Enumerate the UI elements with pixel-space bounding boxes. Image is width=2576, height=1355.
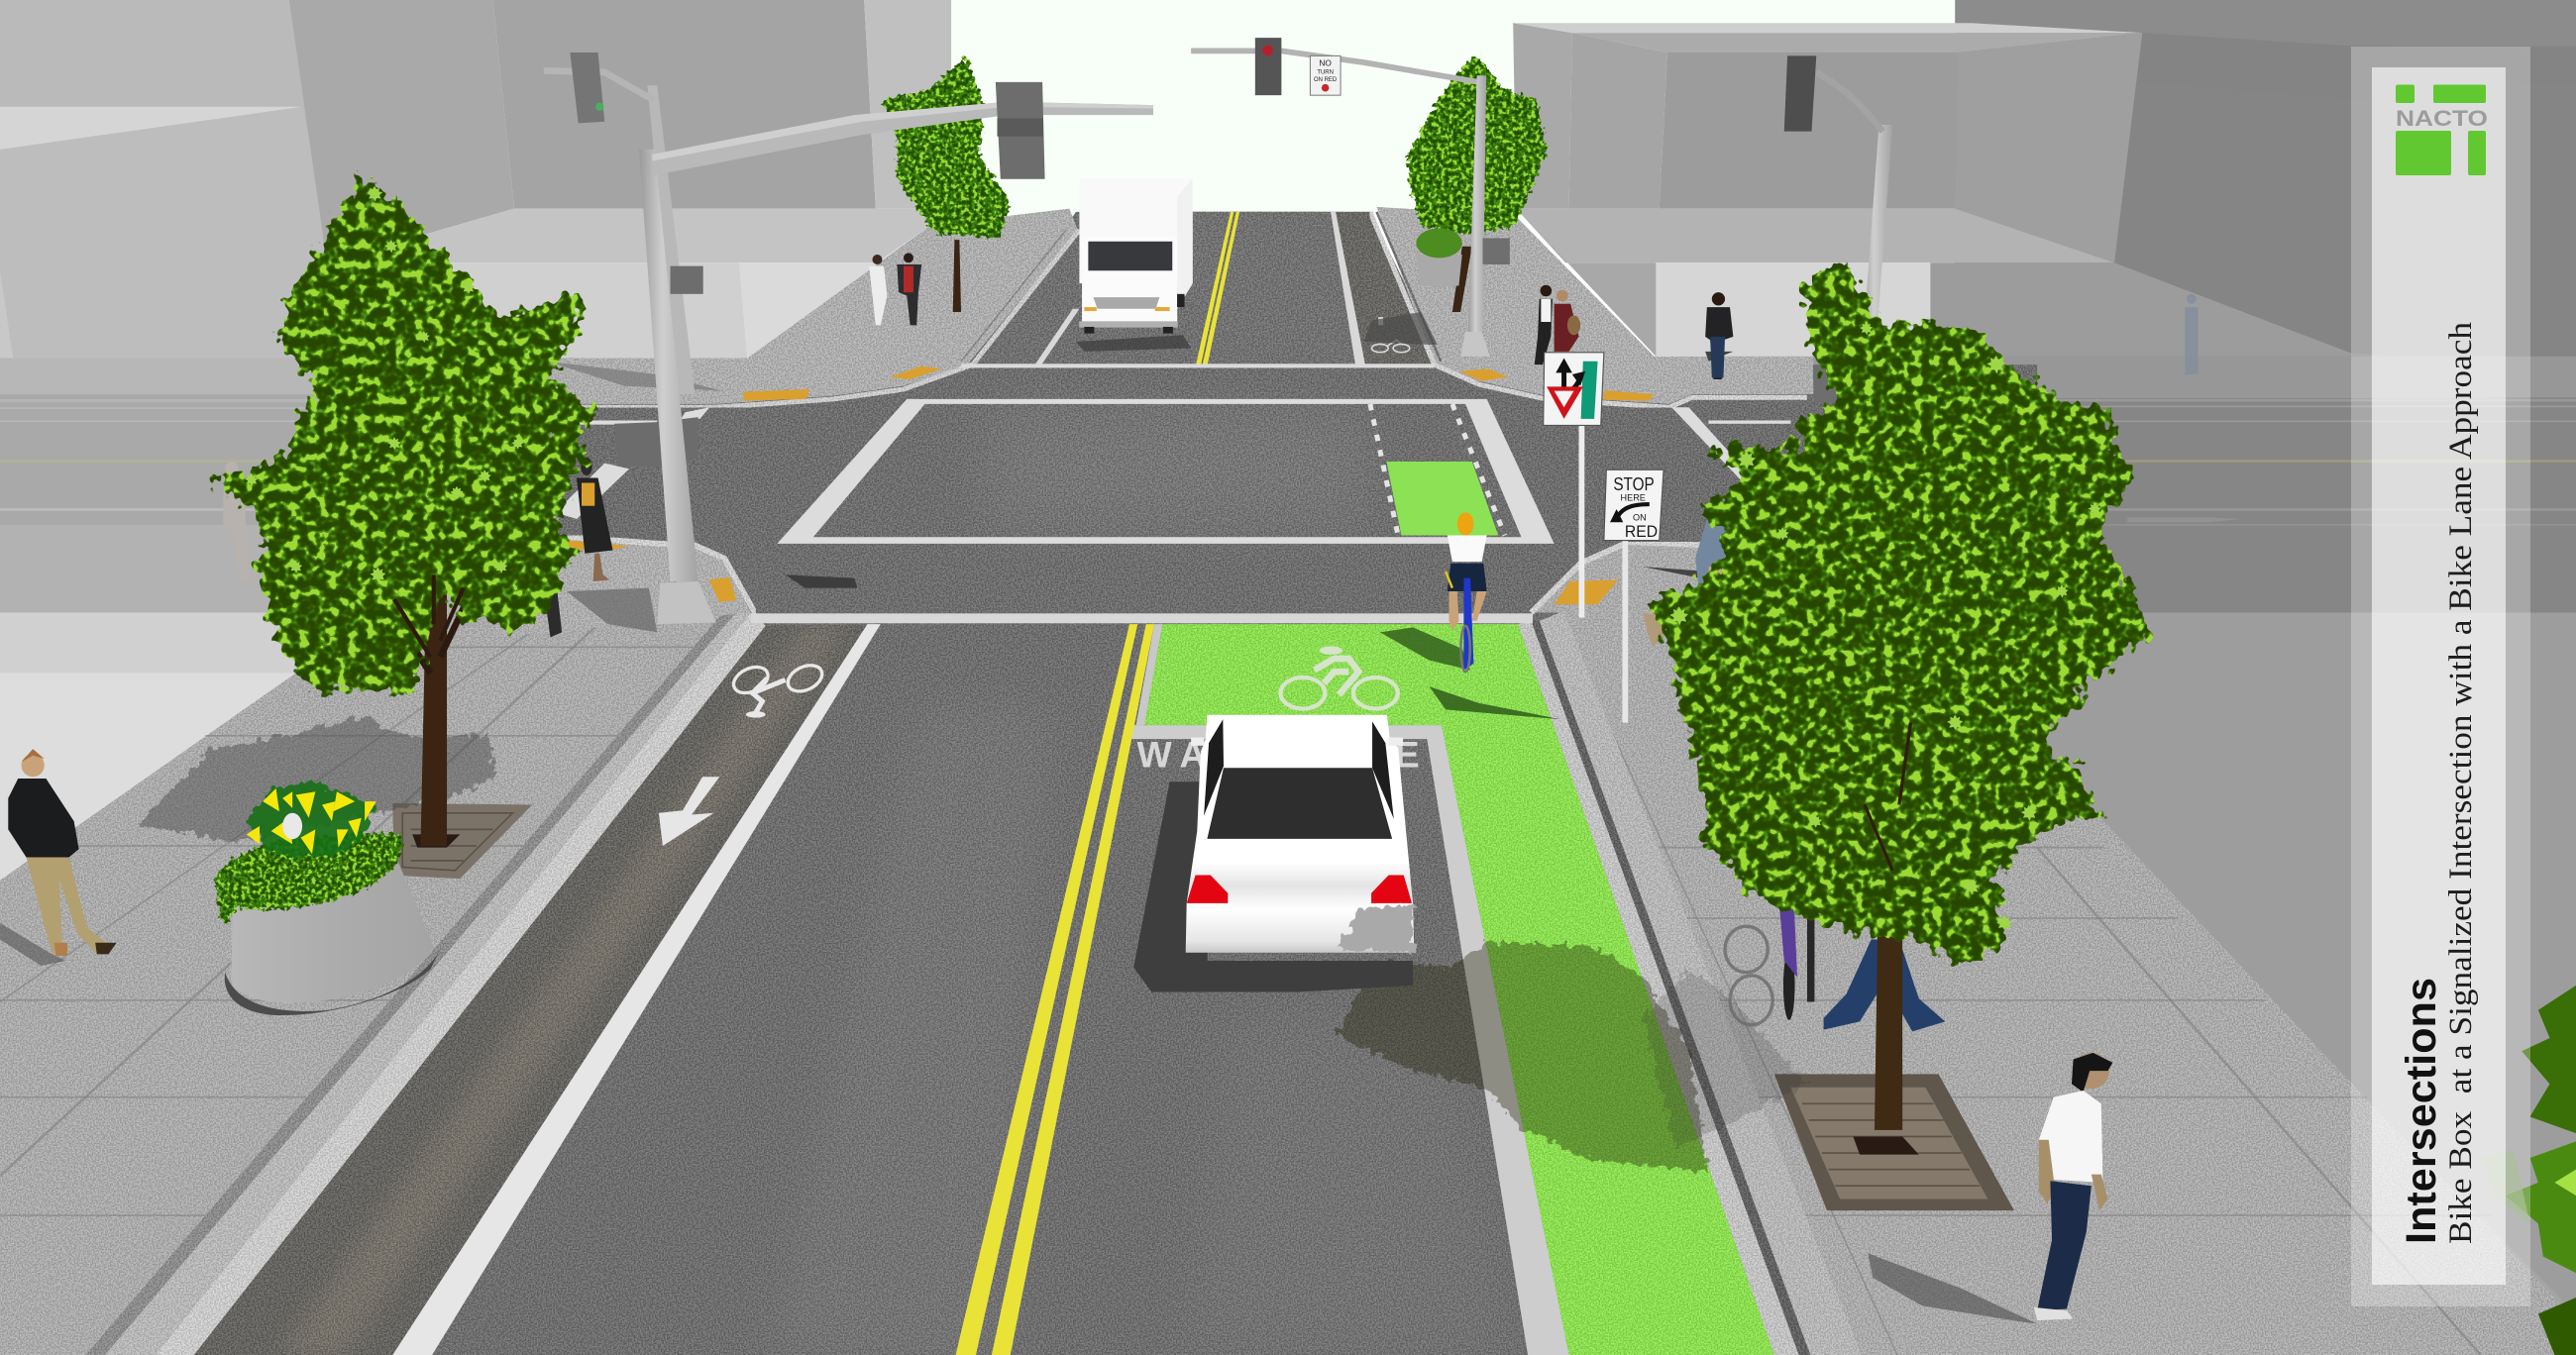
car shadow (1133, 782, 1413, 992)
faded pedestrian right (2185, 294, 2199, 374)
right big tree trunk (1840, 657, 1947, 1130)
left lane direction arrow (659, 777, 719, 846)
right edge tree foliage (2481, 986, 2576, 1355)
man behind tree (519, 529, 562, 637)
tree pit right (1774, 1074, 2014, 1210)
far right concrete planter (1416, 228, 1462, 286)
right signal pole (1784, 55, 1892, 402)
pedestrian behind right tree (1824, 886, 1945, 1031)
parked bicycle and rack (1725, 895, 1814, 1025)
no turn on red sign: NO (1319, 57, 1332, 67)
panel outer band (2351, 47, 2530, 1306)
planter shadow (225, 949, 440, 1015)
no turn on red sign: ON RED (1314, 77, 1338, 83)
far lane stripes (1035, 212, 1365, 365)
panel subheading: Bike Box at a Signalized Intersection with a Bike Lane Approach (2443, 321, 2479, 1244)
main left signal pole and mast arm (639, 82, 1153, 624)
NACTO logo (2396, 85, 2488, 175)
bike box white stripe (1130, 725, 1569, 1355)
flower bush (247, 781, 376, 858)
blue shirt pedestrian with dog (1643, 496, 1752, 647)
right big tree foliage (1643, 258, 2154, 969)
left bike lane symbol (729, 661, 826, 718)
truck (1079, 178, 1193, 334)
advanced bike box outline (777, 399, 1555, 544)
tree pit left (392, 803, 532, 879)
dashed bike lane extension (1370, 404, 1505, 536)
tactile curb ramps (563, 366, 1654, 604)
east crosswalk stripes (1671, 407, 1834, 489)
southwest corner sidewalk (492, 536, 756, 637)
right curb and gutter (1518, 542, 1862, 1355)
man in black jacket (8, 749, 117, 956)
hazy cross street right (1545, 357, 2576, 1355)
left curb and gutter (85, 612, 766, 1355)
pedestrians far left couple (869, 253, 921, 325)
pedestrians far right group (1535, 285, 1580, 365)
concrete planter with flowers (214, 781, 440, 1015)
panel heading: Intersections (2398, 978, 2445, 1244)
planter bowl (231, 844, 434, 1003)
green bike box patch (1386, 462, 1498, 536)
faded pedestrian left (224, 462, 250, 581)
no turn on red sign (1310, 55, 1341, 95)
right tree highlight leaves (1669, 322, 2101, 931)
hazy cross street left (0, 358, 772, 1355)
far left pole (544, 52, 703, 394)
bike symbol on green lane (1281, 646, 1398, 708)
stop here on red sign: ON (1633, 513, 1647, 523)
west crosswalk stripes (542, 407, 709, 519)
panel inner band (2372, 67, 2506, 1285)
right tree branches (1865, 723, 1910, 871)
title panel (2351, 47, 2530, 1306)
northwest corner sidewalk (534, 209, 1079, 407)
shadows on pavement (0, 312, 2037, 1323)
left big tree trunk (387, 509, 472, 846)
left big tree foliage (210, 170, 604, 693)
left tree branches (394, 574, 464, 657)
stop here on red sign (1604, 469, 1664, 723)
cyclist (1446, 512, 1487, 672)
yield to bikes sign (1544, 353, 1604, 617)
road surfaces (194, 212, 2037, 1355)
woman with folder (577, 458, 612, 581)
wait here pavement text: WAIT HERE (1136, 733, 1420, 775)
pedestrian woman by far building (1705, 292, 1733, 379)
lane edge stripe (1136, 624, 1162, 725)
far right signal pole and mast arm (1191, 38, 1510, 357)
right sidewalk joints (1577, 657, 2492, 1355)
far stop line (961, 364, 1435, 367)
left sidewalk (0, 612, 723, 1355)
left sidewalk joints (0, 609, 695, 1215)
stop here on red sign: STOP (1613, 473, 1655, 494)
far bike lane symbol (1372, 317, 1410, 353)
stop here on red sign: HERE (1621, 493, 1646, 503)
left tree highlight leaves (245, 186, 523, 582)
right background buildings (1513, 0, 2576, 427)
sky (0, 0, 2576, 230)
planter greenery (214, 833, 402, 930)
northeast corner sidewalk (1370, 207, 1814, 407)
far right tree (1406, 52, 1548, 312)
far left tree (882, 55, 1011, 312)
double yellow center line (956, 212, 1239, 1355)
left bike lane stripe (392, 624, 881, 1355)
pedestrian signal box (614, 417, 698, 467)
left background buildings (0, 0, 951, 362)
right sidewalk (1531, 542, 2576, 1355)
white car (1186, 715, 1414, 953)
man in white shirt (2034, 1053, 2112, 1320)
bike lane green surface (1144, 624, 1774, 1355)
NACTO logo: NACTO (2396, 106, 2488, 131)
stop here on red sign: RED (1625, 522, 1658, 541)
stop line (751, 613, 1533, 623)
no turn on red sign: TURN (1317, 70, 1334, 76)
